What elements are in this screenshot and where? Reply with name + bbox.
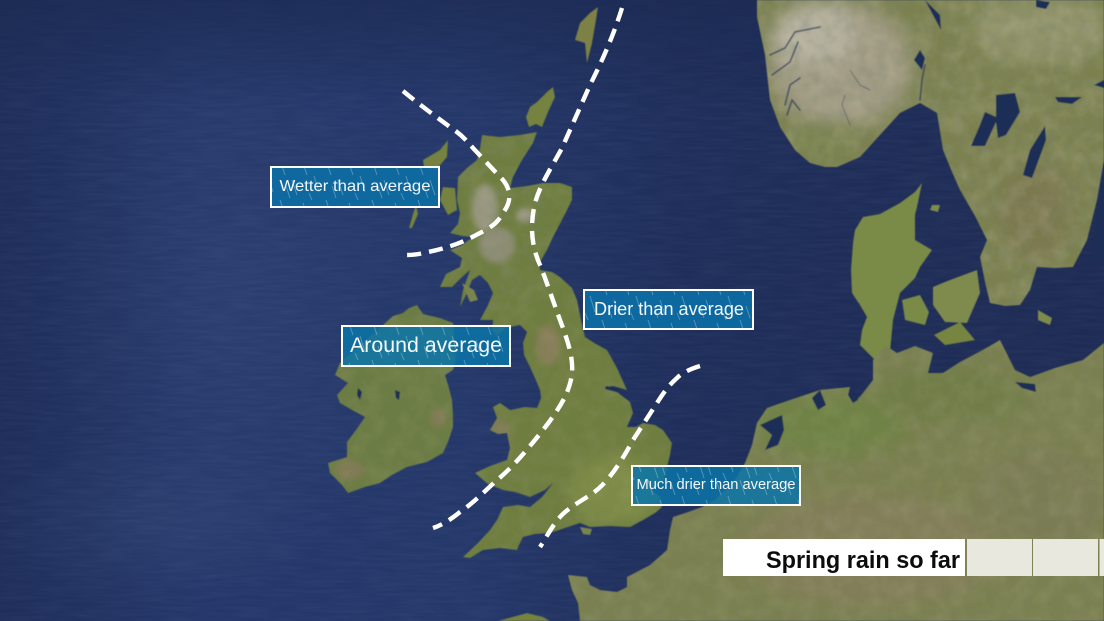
land: Scottish islands (409, 87, 555, 302)
label: Wetter than average: Wetter than average (280, 178, 431, 195)
label: Drier than average: Drier than average (594, 299, 744, 319)
land: Norway and Sweden (750, 0, 1104, 310)
label: Drier than average (584, 290, 753, 329)
land: Shetland (575, 7, 598, 63)
label: Much drier than average: Much drier than average (636, 477, 796, 493)
lakes (914, 0, 1104, 265)
dashed line: much drier boundary (540, 366, 700, 547)
title bar: Spring rain so far: Spring rain so far (766, 547, 960, 574)
satellite land (325, 0, 1104, 621)
Irish loughs and Humber detail (357, 386, 620, 400)
dashed line: wetter boundary (403, 91, 509, 255)
land: Great Britain (440, 130, 680, 560)
title bar: Spring rain so far (723, 539, 1104, 576)
Dutch and German inlets (760, 382, 1036, 450)
land: northern Europe (565, 335, 1104, 621)
label: Around average: Around average (350, 334, 502, 357)
Norwegian fjords (770, 27, 925, 125)
label: Wetter than average (271, 167, 439, 207)
label: Much drier than average (632, 466, 800, 505)
label: Around average (342, 326, 510, 366)
land: Brittany (498, 613, 550, 621)
land: Isle of Wight (580, 527, 592, 535)
land: Denmark (851, 183, 1052, 360)
land: Ireland (328, 304, 456, 494)
dashed line: drier boundary (433, 8, 622, 528)
